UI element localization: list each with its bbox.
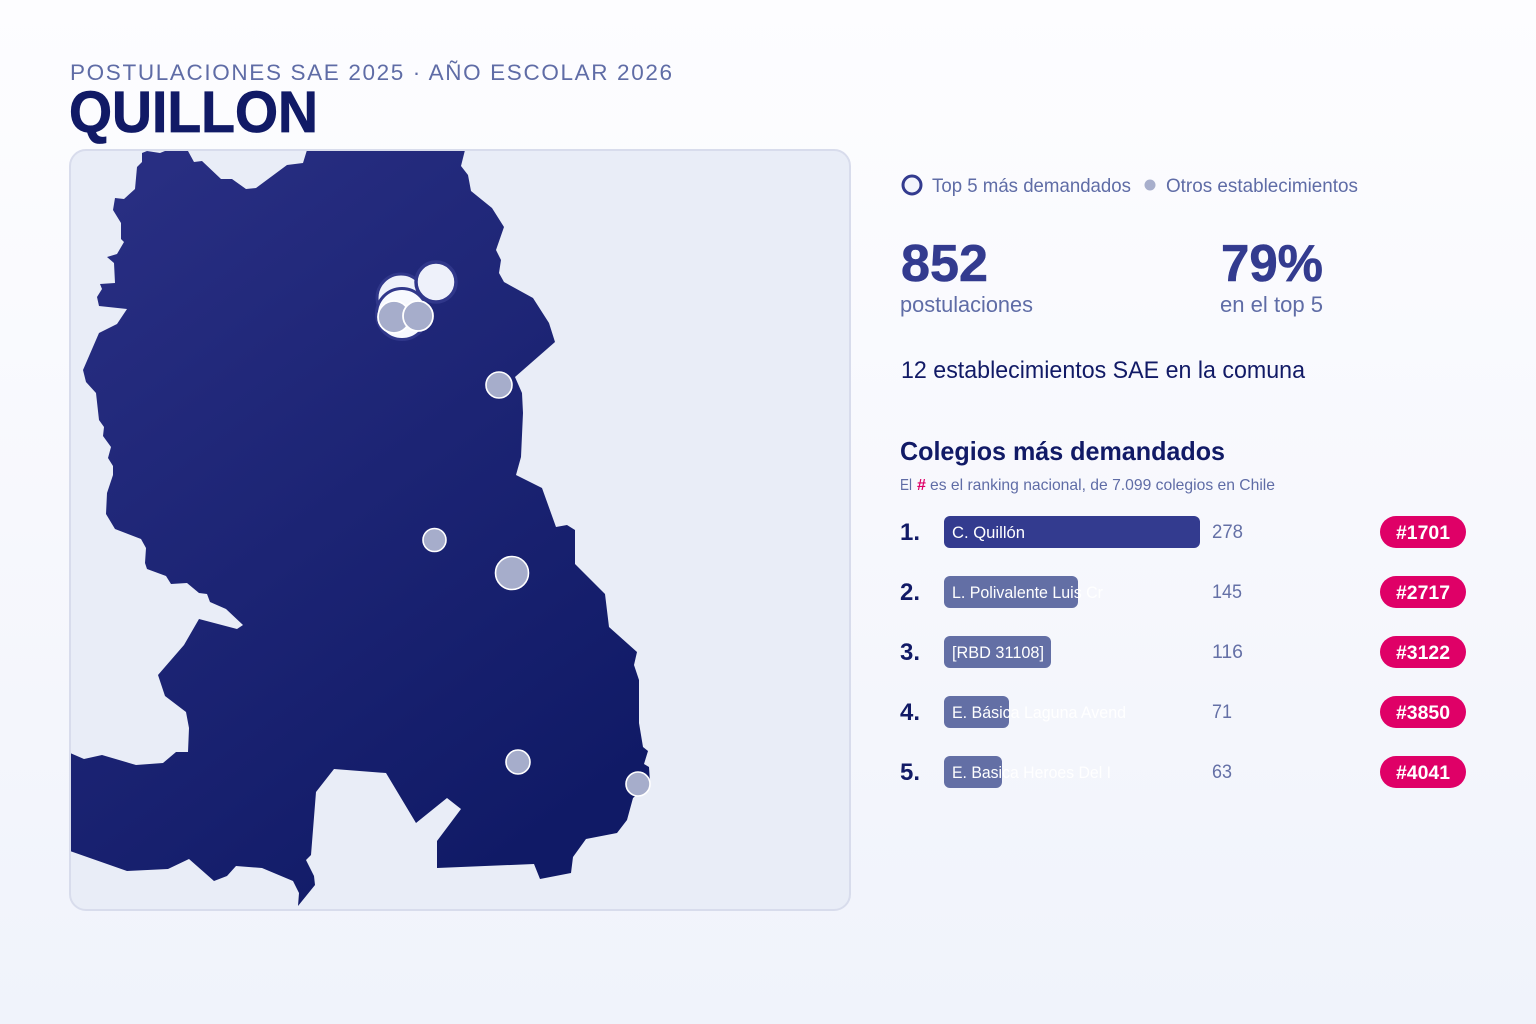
stat: applications: 852 bbox=[901, 235, 988, 293]
ranking row 1: 278 bbox=[1212, 522, 1243, 543]
text: schools in commune: 12 establecimientos SAE en la comuna bbox=[901, 357, 1306, 384]
heading: most demanded schools: Colegios más demandados bbox=[900, 436, 1225, 466]
map marker: top 5 school B bbox=[376, 288, 428, 340]
ranking row 4: 4. bbox=[900, 699, 920, 726]
ranking row 2: 2. bbox=[900, 579, 920, 606]
note: ranking explanation: El bbox=[900, 477, 912, 494]
ranking row 2: L. Polivalente Luis Cr bbox=[952, 583, 1103, 602]
map marker: top 5 school C bbox=[416, 262, 456, 302]
ranking row 4: #3850 bbox=[1396, 703, 1450, 724]
ranking row 3: #3122 bbox=[1396, 643, 1450, 664]
ranking row 4 bbox=[900, 696, 1466, 728]
ranking row 2 bbox=[900, 576, 1466, 608]
legend label: top 5: Top 5 más demandados bbox=[932, 175, 1131, 197]
stat: top 5 share bbox=[1220, 235, 1323, 317]
map: commune shape bbox=[70, 150, 650, 906]
map marker: other school bbox=[496, 556, 528, 590]
ranking row 5: 5. bbox=[900, 759, 920, 786]
ranking row 1 bbox=[900, 516, 1466, 548]
eyebrow heading: POSTULACIONES SAE 2025 · AÑO ESCOLAR 2026 bbox=[70, 60, 672, 85]
stat: top 5 share: en el top 5 bbox=[1220, 292, 1323, 317]
ranking row 4: 71 bbox=[1212, 702, 1232, 723]
map marker: other school bbox=[423, 528, 446, 552]
ranking row 2: #2717 bbox=[1396, 583, 1450, 604]
note: ranking explanation: # bbox=[917, 477, 926, 494]
ranking row 1: #1701 bbox=[1396, 523, 1450, 544]
ranking row 3 bbox=[900, 636, 1466, 668]
map marker: other school bbox=[403, 301, 433, 331]
ranking row 3: 3. bbox=[900, 639, 920, 666]
legend icon: top 5 ring bbox=[903, 176, 921, 194]
ranking row 1: C. Quillón bbox=[952, 523, 1025, 542]
map marker: other school bbox=[506, 750, 530, 774]
stat: top 5 share: 79% bbox=[1221, 235, 1323, 293]
ranking row 3: 116 bbox=[1212, 642, 1243, 663]
map marker: other school bbox=[486, 372, 512, 398]
ranking row 5 bbox=[900, 756, 1466, 788]
title: QUILLON bbox=[69, 80, 318, 145]
legend bbox=[903, 175, 1358, 197]
stat: applications: postulaciones bbox=[900, 292, 1033, 317]
map marker: top 5 school A bbox=[377, 274, 425, 322]
ranking row 1: 1. bbox=[900, 519, 920, 546]
panel: map bbox=[70, 150, 850, 910]
ranking row 5: E. Basica Heroes Del I bbox=[952, 763, 1111, 782]
legend icon: other dot bbox=[1144, 180, 1156, 190]
ranking row 3: [RBD 31108] bbox=[952, 643, 1044, 662]
legend label: others: Otros establecimientos bbox=[1166, 175, 1358, 197]
ranking row 5: #4041 bbox=[1396, 763, 1450, 784]
stat: applications bbox=[900, 235, 1033, 317]
map marker: other school bbox=[378, 301, 410, 333]
ranking row 2: 145 bbox=[1212, 582, 1242, 603]
note: ranking explanation: es el ranking nacional, de 7.099 colegios en Chile bbox=[930, 477, 1275, 494]
ranking row 4: E. Básica Laguna Avend bbox=[952, 703, 1126, 722]
map marker: other school bbox=[626, 772, 650, 796]
ranking row 5: 63 bbox=[1212, 762, 1232, 783]
